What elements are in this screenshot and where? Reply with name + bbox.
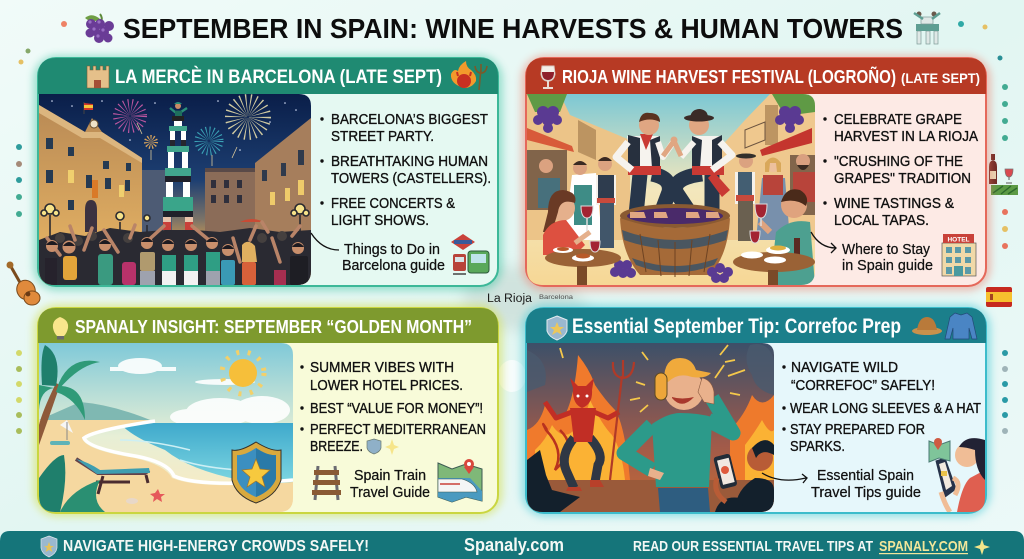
feet in grapes [630,212,720,218]
panel: Rioja Wine Harvest Festival [521,55,991,291]
icon: grapes [85,14,114,43]
text: bullets: GRAPES" TRADITION [834,171,971,187]
text: bullets: LOCAL TAPAS. [834,213,929,229]
illustration: beach [39,343,293,512]
icon: map with train and pin [438,459,482,502]
men stomping grapes [616,109,732,216]
icon: sweater [945,313,977,339]
barrel [620,204,730,277]
crowd [39,222,311,285]
text: bullets [320,112,491,229]
guide link: Travel Guide [350,485,430,501]
footer link: SPANALY.COM [879,538,968,555]
guide link with arrow: in Spain guide [842,258,933,274]
text: bullets: "CRUSHING OF THE [834,154,963,170]
panel header [526,308,986,343]
trident [610,360,634,480]
decorative dots: left side [16,21,67,434]
icon: small shield and sparkle [367,439,399,455]
footer text: call to action: READ OUR ESSENTIAL TRAVEL TIPS AT [633,538,873,555]
buildings [527,94,630,240]
panel: Spanaly Insight [33,304,503,517]
footer text: safety: NAVIGATE HIGH-ENERGY CROWDS SAFELY! [63,538,369,555]
text: bullets: STAY PREPARED FOR [790,422,925,438]
icon: human tower [914,12,940,44]
text: bullets: LIGHT SHOWS. [331,213,429,229]
icon: footer shield [41,536,57,557]
guide link with arrow: Travel Tips guide [811,485,921,501]
text: bullets: PERFECT MEDITERRANEAN [310,422,486,438]
panel header [526,58,986,94]
panel heading: Essential September Tip: Correfoc Prep [572,315,901,338]
text: bullets: BREEZE. [310,439,363,455]
icon: sparkle [974,539,990,555]
guide link with arrow [762,468,921,501]
stars [51,100,297,151]
tables with tapas [545,231,815,286]
title: SEPTEMBER IN SPAIN: WINE HARVESTS & HUMAN TOWERS [123,13,903,44]
panel heading: RIOJA WINE HARVEST FESTIVAL (LOGROÑO) [562,66,896,87]
guide link with arrow [311,233,445,274]
panel: Essential September Tip [521,304,991,517]
text: bullets: WINE TASTINGS & [834,196,954,212]
guide link [350,468,430,501]
illustration: correfoc devil and festival-goer [527,343,774,512]
distant umbrella and lounger [50,420,73,445]
icon: light bulb [53,317,68,340]
text: bullets: SPARKS. [790,439,845,455]
text: bullets: WEAR LONG SLEEVES & A HAT [790,401,981,417]
lounge chair [76,459,150,494]
grape bunches by barrel [610,260,733,283]
grape vines [527,94,815,133]
icon: hotel [942,234,976,276]
text: bullets: “CORREFOC” SAFELY! [791,378,935,394]
guide link: Spain Train [354,468,426,484]
icon: wine glass [541,66,555,88]
footer text: site: Spanaly.com [464,535,564,555]
festival onlookers [538,154,815,248]
faint map of Spain behind the panels [462,266,590,392]
text: bullets: HARVEST IN LA RIOJA [834,129,978,145]
footer banner [0,531,1024,559]
label: Barcelona: Barcelona [539,294,573,301]
text: bullets: SUMMER VIBES WITH [310,360,454,376]
text: bullets: STREET PARTY. [331,129,434,145]
icon: hat [912,317,942,335]
icon: Spanish flag [986,287,1012,307]
illustration: woman with tablet [936,438,985,512]
icon: hotel: HOTEL [947,236,970,244]
tropical leaves [39,455,105,512]
guide link with arrow [811,232,933,274]
decorative dots: right side [958,21,1008,434]
text: bullets [782,360,981,455]
left man's legs [636,174,669,216]
panel heading suffix: (LATE SEPT) [901,70,980,86]
icon: map and pin [929,438,950,462]
text: bullets: BREATHTAKING HUMAN [331,154,488,170]
icon: shield [547,316,567,340]
palm tree [39,345,100,445]
woman at table with wine [543,190,593,255]
panel header [38,308,498,343]
man at table with wine [755,189,815,285]
devil [543,378,619,491]
guide link with arrow: Barcelona guide [342,258,445,274]
text: bullets [823,112,978,229]
buildings [39,105,142,245]
person with phone [713,440,774,512]
panel header [38,58,498,94]
icon: guitar [6,262,40,305]
icon: metro, train and bus [451,234,489,274]
text: bullets: FREE CONCERTS & [331,196,455,212]
right man's torso [692,136,720,166]
starfish and shell [126,489,165,504]
guide link with arrow: Things to Do in [344,242,440,258]
sun [222,352,264,394]
human tower [163,102,193,232]
guide link with arrow: Essential Spain [817,468,914,484]
text: bullets: LOWER HOTEL PRICES. [310,378,463,394]
text: bullets [300,360,486,455]
icon: fire devil and trident [451,61,487,90]
icon: railway tracks [312,466,341,500]
dark silhouette [527,450,580,512]
guide link with arrow: Where to Stay [842,242,931,258]
man with headphones [624,358,733,512]
shield with star [232,442,281,503]
fireworks [121,105,260,166]
right man's legs [676,174,712,216]
panel: La Mercè in Barcelona [33,55,503,291]
illustration: grape stomping [527,94,815,286]
text: bullets: TOWERS (CASTELLERS). [331,171,491,187]
panel heading: SPANALY INSIGHT: SEPTEMBER “GOLDEN MONTH” [75,317,472,337]
sparks [560,345,745,412]
clouds [110,358,290,426]
sea [120,423,293,485]
panel heading: LA MERCÈ IN BARCELONA (LATE SEPT) [115,66,442,88]
icon: wine bottle and vineyard [989,154,1018,195]
text: bullets: CELEBRATE GRAPE [834,112,962,128]
text: bullets: BEST “VALUE FOR MONEY”! [310,401,483,417]
icon: castle [87,66,109,88]
sand [39,420,293,512]
label: La Rioja: La Rioja [487,293,533,305]
flames [527,355,630,480]
illustration: castellers and fireworks at night [39,94,311,285]
street lamps [41,204,309,240]
text: bullets: NAVIGATE WILD [791,360,898,376]
text: bullets: BARCELONA’S BIGGEST [331,112,488,128]
left man's torso [627,136,660,166]
